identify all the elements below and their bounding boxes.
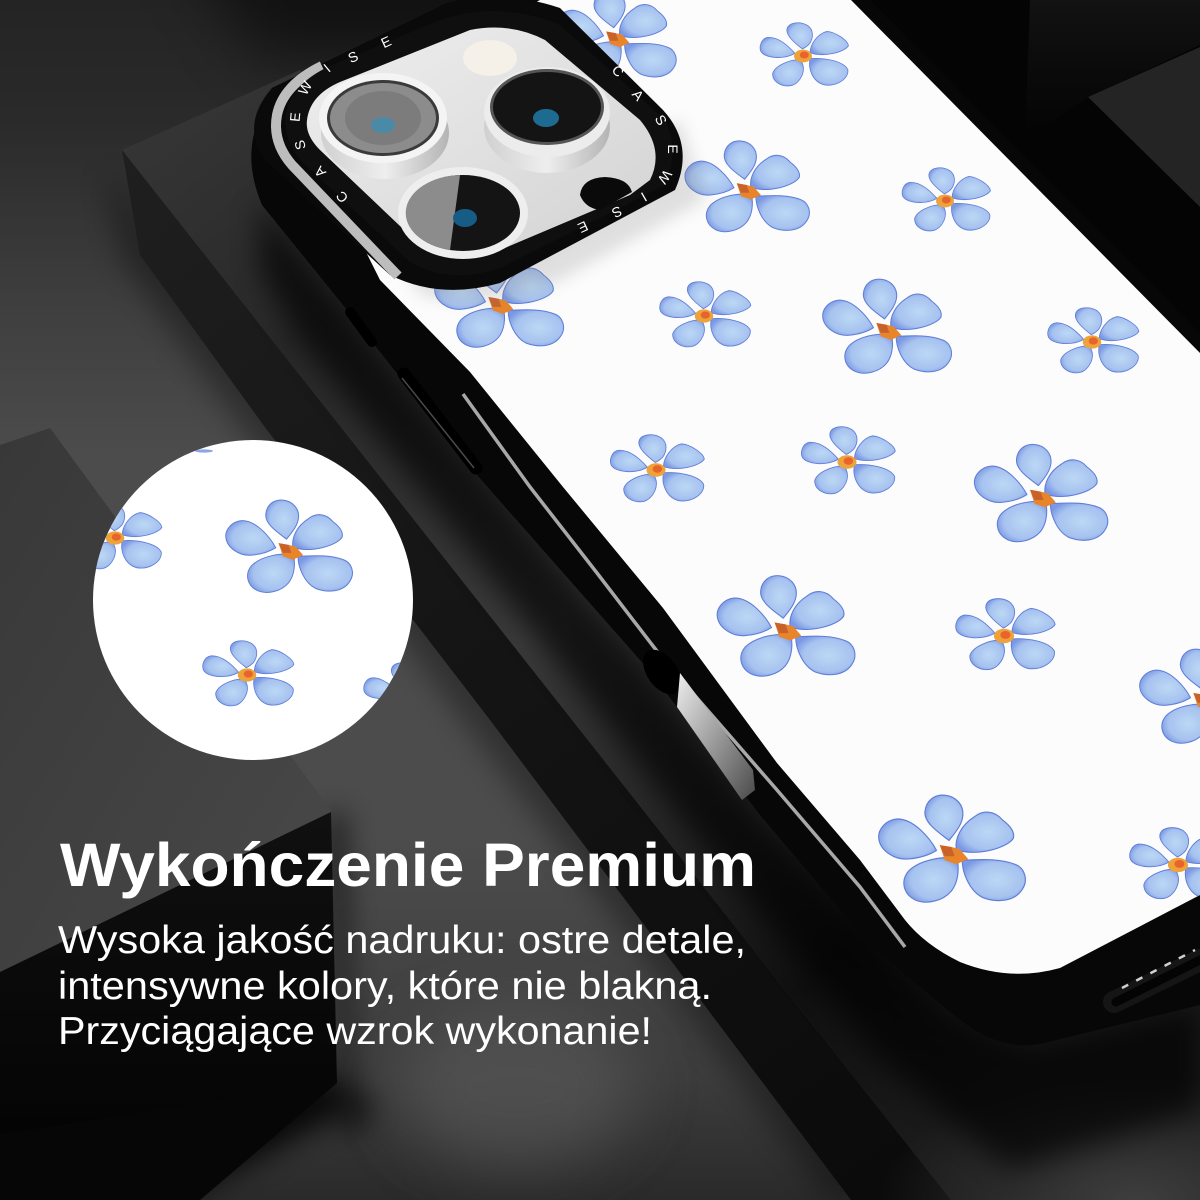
CASEWISE ring lettering, right: S — [609, 203, 625, 221]
phone case body — [251, 0, 1200, 1045]
silver side button — [677, 673, 755, 800]
black camera ring — [254, 0, 683, 290]
reflective strip on ring — [276, 66, 398, 276]
inner ring band — [285, 11, 672, 275]
mute switch — [350, 312, 372, 342]
white printed back panel — [300, 0, 1200, 974]
CASEWISE ring lettering, right: S — [652, 112, 670, 128]
CASEWISE ring lettering, right — [575, 62, 681, 236]
camera glass — [307, 28, 656, 258]
description text: intensywne kolory, które nie blakną. — [58, 965, 712, 1008]
CASEWISE ring lettering, left: E — [378, 33, 394, 51]
CASEWISE ring lettering, right: C — [609, 62, 627, 80]
charging port — [1114, 950, 1200, 1002]
CASEWISE ring lettering, right: I — [638, 189, 650, 205]
lens: upper left — [319, 73, 449, 179]
CASEWISE ring lettering, right: E — [575, 218, 591, 236]
description text — [58, 919, 746, 1053]
print detail magnifier circle — [93, 440, 413, 760]
magnified flowers — [96, 449, 400, 706]
side key recess — [635, 643, 689, 701]
phone with black case — [251, 0, 1200, 1045]
camera island shadow — [400, 120, 705, 300]
microphone hole — [580, 177, 632, 210]
CASEWISE ring lettering, right: E — [665, 144, 681, 154]
CASEWISE ring lettering, left: E — [287, 112, 303, 122]
lens: bottom — [398, 167, 528, 259]
CASEWISE ring lettering, left: S — [291, 138, 309, 152]
CASEWISE ring lettering, left: I — [320, 61, 334, 75]
CASEWISE ring lettering, left: C — [333, 188, 351, 206]
heading: Wykończenie Premium — [60, 831, 756, 899]
blue flower pattern — [435, 0, 1200, 902]
CASEWISE ring lettering, right: W — [654, 167, 675, 188]
case edge highlight — [463, 394, 905, 947]
description text: Wysoka jakość nadruku: ostre detale, — [58, 919, 746, 962]
CASEWISE ring lettering, left — [287, 33, 394, 206]
CASEWISE ring lettering, left: W — [295, 78, 316, 98]
lens: upper right — [484, 67, 610, 173]
camera island — [254, 0, 683, 290]
CASEWISE ring lettering, right: A — [629, 86, 648, 104]
CASEWISE ring lettering, left: S — [345, 48, 361, 66]
description text: Przyciągające wzrok wykonanie! — [58, 1010, 652, 1053]
flash — [463, 40, 517, 76]
volume button — [402, 374, 476, 468]
CASEWISE ring lettering, left: A — [310, 163, 329, 181]
